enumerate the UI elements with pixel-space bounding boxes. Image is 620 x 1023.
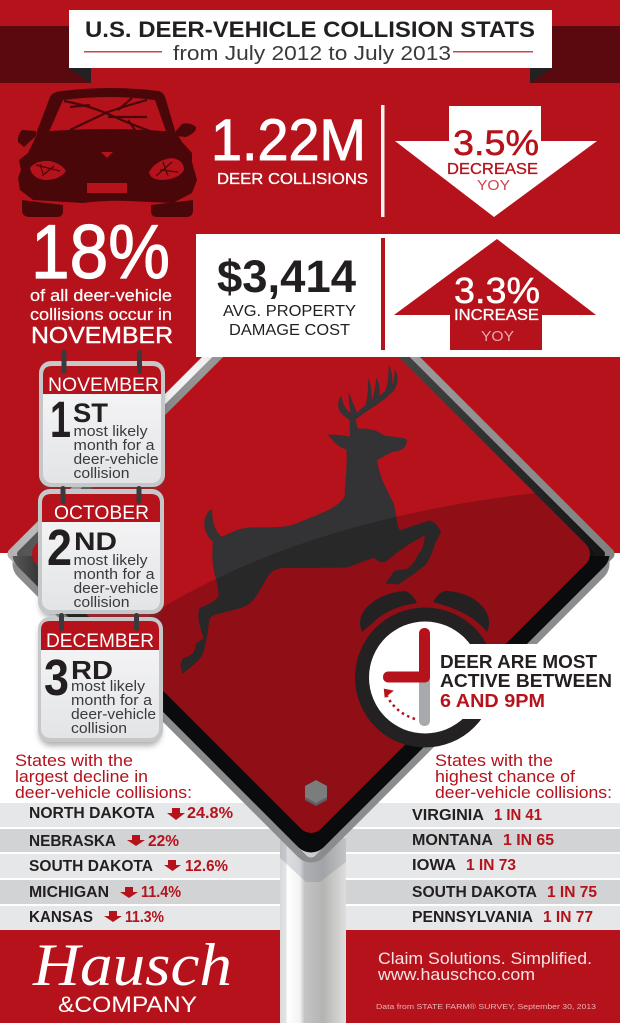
calendar: November: most likely bbox=[74, 423, 148, 440]
stat: 18% in November: 18% bbox=[31, 210, 170, 295]
list: highest chance states: 1 IN 65 bbox=[503, 832, 554, 849]
arrow: 3.3% increase: 3.3% bbox=[454, 270, 540, 311]
list: largest decline states: 11.4% bbox=[141, 884, 181, 901]
calendar: November: collision bbox=[74, 465, 130, 482]
list: largest decline states: NEBRASKA bbox=[29, 833, 116, 850]
road sign bbox=[8, 357, 614, 862]
callout: deer activity bbox=[440, 652, 612, 711]
calendar: November: NOVEMBER bbox=[48, 375, 159, 396]
heading: largest decline: States with the bbox=[15, 752, 133, 770]
list: largest decline states: SOUTH DAKOTA bbox=[29, 858, 153, 875]
header ribbon bbox=[0, 26, 620, 83]
title box bbox=[69, 10, 552, 68]
callout: deer activity: DEER ARE MOST bbox=[440, 652, 597, 672]
calendar: November: month for a bbox=[74, 437, 155, 454]
calendar: November bbox=[39, 350, 165, 491]
arrow: 3.5% decrease: 3.5% bbox=[453, 124, 539, 163]
list: highest chance states: 1 IN 73 bbox=[466, 857, 516, 874]
background: white lower area bbox=[0, 553, 620, 1023]
divider bbox=[381, 105, 384, 217]
background: red upper area bbox=[0, 0, 620, 553]
calendar: November: 1 bbox=[50, 391, 71, 448]
tagline bbox=[377, 950, 592, 984]
state table row bands bbox=[0, 803, 620, 930]
calendar: October: most likely bbox=[74, 552, 148, 569]
calendar: October: OCTOBER bbox=[54, 503, 149, 524]
calendar: October: 2 bbox=[47, 519, 72, 576]
calendar: October: ND bbox=[74, 528, 117, 556]
source note: Data from STATE FARM® SURVEY, September 30, 2013 bbox=[376, 1002, 596, 1011]
calendar: December: 3 bbox=[44, 649, 69, 706]
heading: highest chance: deer-vehicle collisions: bbox=[435, 784, 612, 802]
list: highest chance states: 1 IN 75 bbox=[547, 884, 597, 901]
logo: Hausch and Company: &COMPANY bbox=[58, 992, 197, 1017]
stat: 18% in November: NOVEMBER bbox=[31, 322, 173, 348]
arrow: 3.5% decrease: DECREASE bbox=[447, 161, 538, 178]
panel: property damage: AVG. PROPERTY bbox=[223, 303, 356, 320]
dotted arrow bbox=[382, 686, 415, 719]
stat: 18% in November: collisions occur in bbox=[30, 305, 172, 324]
calendar: October: collision bbox=[74, 594, 130, 611]
callout: deer activity: ACTIVE BETWEEN bbox=[440, 671, 612, 691]
panel: property damage: DAMAGE COST bbox=[229, 322, 350, 339]
callout: deer activity: 6 AND 9PM bbox=[440, 691, 545, 711]
tagline: www.hauschco.com bbox=[377, 966, 535, 984]
calendar: December: month for a bbox=[71, 692, 153, 709]
list: largest decline states: MICHIGAN bbox=[29, 884, 109, 901]
list: largest decline states: 22% bbox=[148, 833, 179, 850]
calendar: December: deer-vehicle bbox=[71, 706, 156, 723]
calendar: December: RD bbox=[71, 655, 113, 685]
arrow: 3.5% decrease bbox=[395, 106, 597, 217]
list: highest chance states: MONTANA bbox=[412, 832, 493, 849]
icon: crashed car bbox=[18, 88, 197, 217]
bolt bbox=[305, 780, 327, 806]
list: highest chance states bbox=[412, 807, 597, 926]
list: highest chance states: 1 IN 41 bbox=[494, 807, 542, 824]
car headlights bbox=[30, 152, 184, 193]
title: U.S. DEER-VEHICLE COLLISION STATS bbox=[85, 17, 535, 42]
arrow: 3.5% decrease: YOY bbox=[477, 177, 510, 194]
clock hands bbox=[383, 628, 430, 726]
heading: largest decline: deer-vehicle collisions: bbox=[15, 784, 192, 802]
stat: 18% in November bbox=[30, 210, 173, 348]
list: largest decline states bbox=[29, 805, 233, 926]
subtitle: from July 2012 to July 2013 bbox=[173, 43, 451, 65]
calendar: October bbox=[38, 486, 164, 618]
sign glare shade bbox=[148, 493, 590, 833]
list: highest chance states: VIRGINIA bbox=[412, 807, 484, 824]
calendar: October: deer-vehicle bbox=[74, 580, 158, 597]
calendar: December: most likely bbox=[71, 678, 146, 695]
icon: leaping deer bbox=[181, 366, 441, 673]
calendar: December bbox=[38, 613, 163, 746]
panel: property damage bbox=[196, 234, 620, 357]
stat: deer collisions: 1.22M bbox=[211, 108, 366, 173]
calendar: November: deer-vehicle bbox=[74, 451, 158, 468]
heading: highest chance: States with the bbox=[435, 752, 553, 770]
list: largest decline states: 24.8% bbox=[187, 805, 233, 822]
calendar: December: DECEMBER bbox=[46, 631, 154, 652]
list: largest decline states: NORTH DAKOTA bbox=[29, 805, 155, 822]
arrow: 3.3% increase: INCREASE bbox=[454, 307, 539, 324]
stat: deer collisions: DEER COLLISIONS bbox=[217, 171, 368, 188]
list: highest chance states: 1 IN 77 bbox=[543, 909, 593, 926]
tagline: Claim Solutions. Simplified. bbox=[378, 950, 592, 968]
car windshield cracks bbox=[64, 98, 150, 131]
panel: property damage: $3,414 bbox=[217, 251, 356, 302]
list: largest decline states: KANSAS bbox=[29, 909, 93, 926]
icon: alarm clock bbox=[355, 591, 620, 748]
arrow: 3.3% increase: YOY bbox=[481, 328, 514, 345]
arrow: 3.3% increase bbox=[394, 239, 596, 350]
calendar: November: ST bbox=[73, 398, 109, 428]
heading: largest decline bbox=[15, 752, 192, 802]
stat: 18% in November: of all deer-vehicle bbox=[30, 286, 172, 305]
heading: largest decline: largest decline in bbox=[15, 768, 148, 786]
list: highest chance states: IOWA bbox=[412, 857, 456, 874]
calendar: December: collision bbox=[71, 720, 127, 737]
list: largest decline states: 11.3% bbox=[125, 909, 164, 926]
list: largest decline states: 12.6% bbox=[185, 858, 228, 875]
list: highest chance states: PENNSYLVANIA bbox=[412, 909, 533, 926]
list: highest chance states: SOUTH DAKOTA bbox=[412, 884, 537, 901]
heading: highest chance: highest chance of bbox=[435, 768, 575, 786]
sign post bbox=[280, 830, 346, 1023]
logo: Hausch and Company: Hausch bbox=[32, 932, 232, 998]
footer band bbox=[0, 930, 620, 1023]
heading: highest chance bbox=[435, 752, 612, 802]
calendar: October: month for a bbox=[74, 566, 155, 583]
